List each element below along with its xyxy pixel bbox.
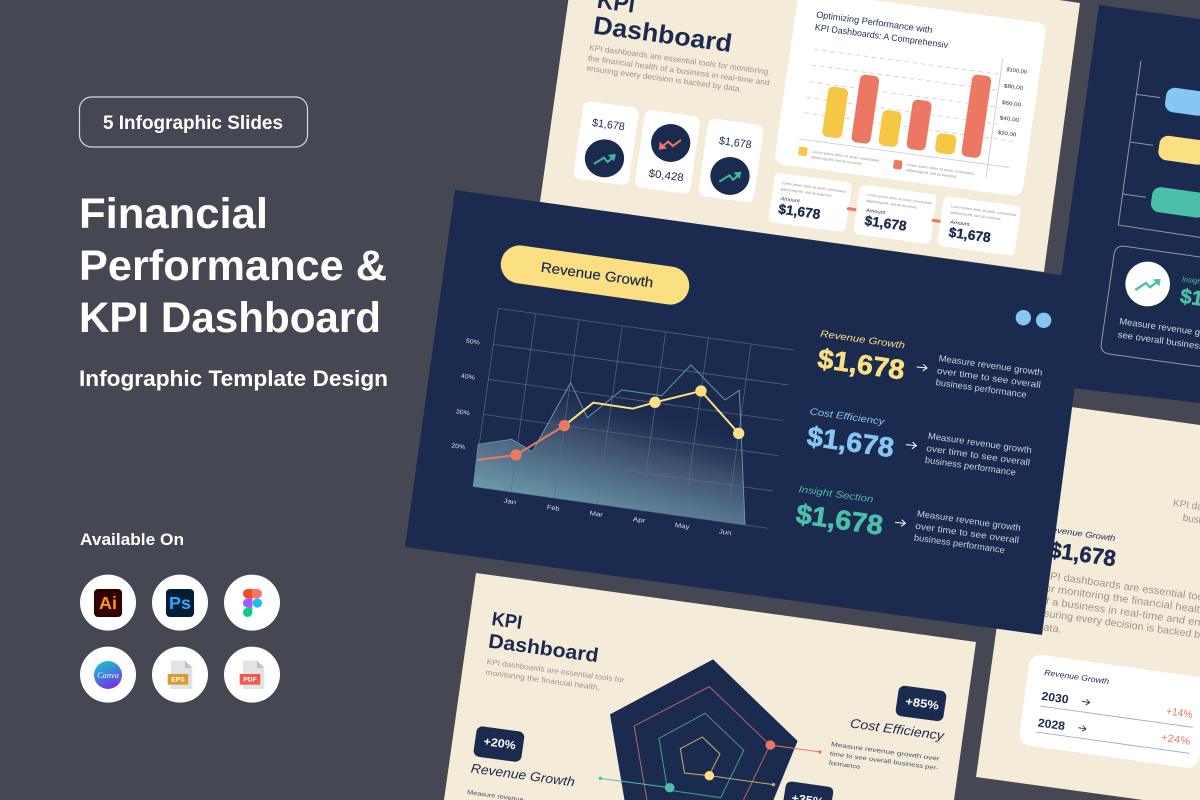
chart title: Optimizing Performance with — [816, 10, 933, 35]
KPI card 1: $1,678 — [591, 117, 625, 133]
software icons — [80, 575, 280, 703]
y axis labels: 30% — [455, 408, 471, 417]
amount card 3: Amount — [949, 219, 970, 228]
bars — [822, 74, 992, 158]
callout: +20% revenue growth: +20% — [483, 734, 517, 752]
trend line — [477, 385, 744, 461]
KPI card 2: $0,428 — [648, 168, 684, 184]
callout: +35% — [783, 782, 833, 800]
icon: PDF file: PDF — [243, 677, 257, 684]
legend: Lorem ipsum dolor sit amet, consectetur — [906, 163, 975, 176]
axis labels: $100,00 — [1006, 67, 1027, 76]
metric: insight section: business performance — [913, 532, 1006, 555]
x axis labels: May — [674, 522, 691, 531]
x axis labels: Feb — [546, 504, 560, 513]
line chart — [451, 243, 793, 537]
metric: revenue growth — [816, 329, 1043, 400]
amount card 3: Lorem ipsum dolor sit amet, consectetur — [951, 204, 1017, 217]
axis labels — [997, 67, 1027, 138]
title: KPI Dashboard — [79, 294, 381, 342]
legend: adipiscing elit, sed do eiusmod. — [811, 155, 862, 166]
x axis labels — [503, 498, 732, 537]
callout: +85% cost efficiency: +85% — [904, 694, 940, 713]
callout: +85% cost efficiency — [828, 685, 947, 772]
panel: insight card — [1101, 246, 1200, 367]
subtitle: Infographic Template Design — [79, 366, 388, 391]
KPI card 3: $1,678 — [718, 135, 752, 151]
amount card 1 — [768, 172, 852, 232]
amount card 2: Lorem ipsum dolor sit amet, consectetur — [867, 193, 933, 206]
amount card 3: adipiscing elit, sed do eiusmod. — [950, 210, 1002, 221]
available on heading: Available On — [80, 530, 184, 549]
callout: +20% revenue growth: Revenue Growth — [470, 761, 576, 789]
metric: insight section: over time to see overall — [915, 521, 1020, 545]
title: Performance & — [79, 242, 387, 290]
chart title — [814, 10, 949, 50]
amount card 2 — [853, 184, 937, 244]
metric: revenue growth: Revenue Growth — [820, 329, 906, 352]
KPI card 3 — [698, 118, 764, 203]
marker: revenue growth — [599, 777, 674, 792]
metric: revenue growth: Measure revenue growth — [938, 353, 1043, 378]
chart pill heading: Revenue Growth — [540, 259, 654, 290]
metric: insight section: Insight Section — [798, 484, 874, 505]
amount card 2: adipiscing elit, sed do eiusmod. — [866, 199, 918, 210]
icon: Illustrator: Ai — [99, 593, 117, 613]
KPI card 2 — [634, 109, 701, 194]
badge: 5 Infographic Slides: 5 Infographic Slides — [103, 113, 283, 134]
chart title: KPI Dashboards: A Comprehensiv — [814, 22, 949, 50]
metric label: Revenue Growth — [1045, 523, 1116, 543]
panel: bar chart card — [774, 0, 1047, 197]
heading — [487, 608, 600, 667]
bars — [1150, 87, 1200, 219]
bar chart axis — [1118, 61, 1200, 237]
amount card 1: adipiscing elit, sed do eiusmod. — [780, 187, 832, 198]
metrics column — [794, 310, 1051, 555]
callout: +85% cost efficiency: Measure revenue growth over — [830, 741, 940, 763]
callout: +85% cost efficiency: formance — [828, 760, 861, 771]
amount card 2: Amount — [864, 208, 886, 216]
slide: right cream revenue panel — [976, 401, 1200, 800]
amount card 1: Lorem ipsum dolor sit amet, consectetur — [781, 181, 848, 194]
marker: insight — [704, 771, 775, 786]
metric: cost efficiency: Cost Efficiency — [809, 406, 886, 428]
metric amount: $1,678 — [1048, 537, 1117, 571]
description: ensuring every decision is backed by data. — [586, 64, 743, 94]
x axis labels: Apr — [632, 516, 646, 525]
insight description — [1117, 316, 1200, 359]
amount card 3: $1,678 — [948, 224, 992, 245]
icon: PDF file — [224, 647, 280, 703]
icon: EPS file: EPS — [171, 677, 185, 684]
area — [473, 365, 745, 525]
metric: cost efficiency: $1,678 — [805, 420, 896, 463]
description — [586, 43, 770, 94]
row 2028 — [1036, 716, 1192, 753]
amount card 1: Amount — [779, 196, 801, 205]
description: for monitoring the financial health — [1041, 583, 1200, 617]
marker: cost efficiency — [766, 740, 822, 754]
x axis labels: Mar — [589, 510, 603, 519]
amount card 3 — [937, 196, 1021, 256]
icon: EPS file — [152, 647, 208, 703]
icon: trend up — [1125, 262, 1170, 306]
axis labels: $40,00 — [999, 115, 1019, 124]
row 2028: +24% — [1160, 732, 1192, 748]
y axis labels — [451, 338, 481, 451]
y axis labels: 20% — [451, 442, 466, 451]
description: KPI dashboards are essential tools for — [486, 657, 625, 685]
metric: revenue growth: business performance — [935, 377, 1027, 400]
icon: Canva — [80, 647, 136, 703]
metric: revenue growth: over time to see overall — [936, 365, 1041, 390]
description: ensuring every decision is backed by — [1032, 607, 1200, 642]
axis labels: $20,00 — [997, 130, 1017, 138]
connector — [933, 220, 942, 222]
metric: cost efficiency: over time to see overall — [926, 443, 1031, 468]
panel: growth card — [1018, 653, 1200, 769]
metric: cost efficiency — [805, 406, 1032, 477]
panel: growth card: Revenue Growth — [1044, 668, 1110, 686]
dots — [1016, 310, 1051, 328]
metric: insight section — [794, 484, 1021, 555]
icon: Illustrator — [80, 575, 136, 631]
slide: right navy bars — [1046, 5, 1200, 403]
slide: bottom cream radar — [444, 573, 976, 800]
metric: cost efficiency: business performance — [924, 455, 1017, 477]
description: KPI dashboards are essential tools — [1042, 570, 1200, 605]
heading: Dashboard — [487, 631, 600, 667]
x axis labels: Jan — [503, 498, 517, 506]
description — [1032, 570, 1200, 642]
row 2030: 2030 — [1041, 690, 1069, 706]
title — [79, 190, 387, 342]
axis labels: $80,00 — [1004, 83, 1023, 92]
icon: Photoshop — [152, 575, 208, 631]
slide: top cream KPI dashboard — [540, 0, 1080, 272]
description: monitoring the financial health. — [485, 668, 601, 692]
y axis labels: 40% — [460, 373, 476, 382]
amount card 1: $1,678 — [778, 201, 822, 222]
callout: +20% revenue growth — [467, 726, 576, 800]
metric: cost efficiency: Measure revenue growth — [927, 431, 1032, 455]
badge: 5 Infographic Slides — [80, 97, 308, 147]
KPI card 1 — [573, 101, 639, 186]
callout: +85% cost efficiency: time to see overall business per- — [829, 750, 939, 772]
x axis labels: Jun — [718, 528, 732, 537]
left column: promo text and icons — [79, 97, 388, 703]
legend: Lorem ipsum dolor sit amet, consectetur — [812, 150, 881, 163]
icon: Figma — [224, 575, 280, 631]
description: the financial health of a business in real-time and — [587, 54, 770, 87]
title: Financial — [79, 190, 268, 238]
axis labels: $60,00 — [1001, 100, 1021, 109]
description: data. — [1036, 621, 1063, 636]
connector — [848, 209, 857, 210]
callout: +85% cost efficiency: Cost Efficiency — [849, 716, 946, 743]
row 2028: 2028 — [1037, 716, 1066, 733]
slide: main navy revenue growth — [405, 190, 1089, 635]
heading: KPI — [490, 608, 523, 634]
amount card 2: $1,678 — [864, 212, 908, 234]
metric: revenue growth: $1,678 — [816, 343, 907, 385]
chart pill heading — [498, 243, 692, 307]
y axis labels: 50% — [465, 338, 481, 347]
legend: adipiscing elit, sed do eiusmod. — [905, 168, 957, 179]
description: KPI dashboards are essential tools for monitoring — [589, 43, 769, 76]
description: of a business in real-time and en — [1039, 595, 1200, 629]
icon: Canva: Canva — [97, 671, 119, 680]
row 2030 — [1040, 690, 1194, 727]
radar chart — [599, 659, 822, 800]
metric: insight section: Measure revenue growth — [916, 508, 1021, 533]
metric: insight section: $1,678 — [794, 498, 885, 541]
legend — [798, 146, 975, 179]
row 2030: +14% — [1165, 705, 1194, 721]
heading: Dashboard — [592, 12, 734, 58]
icon: Photoshop: Ps — [169, 593, 191, 613]
